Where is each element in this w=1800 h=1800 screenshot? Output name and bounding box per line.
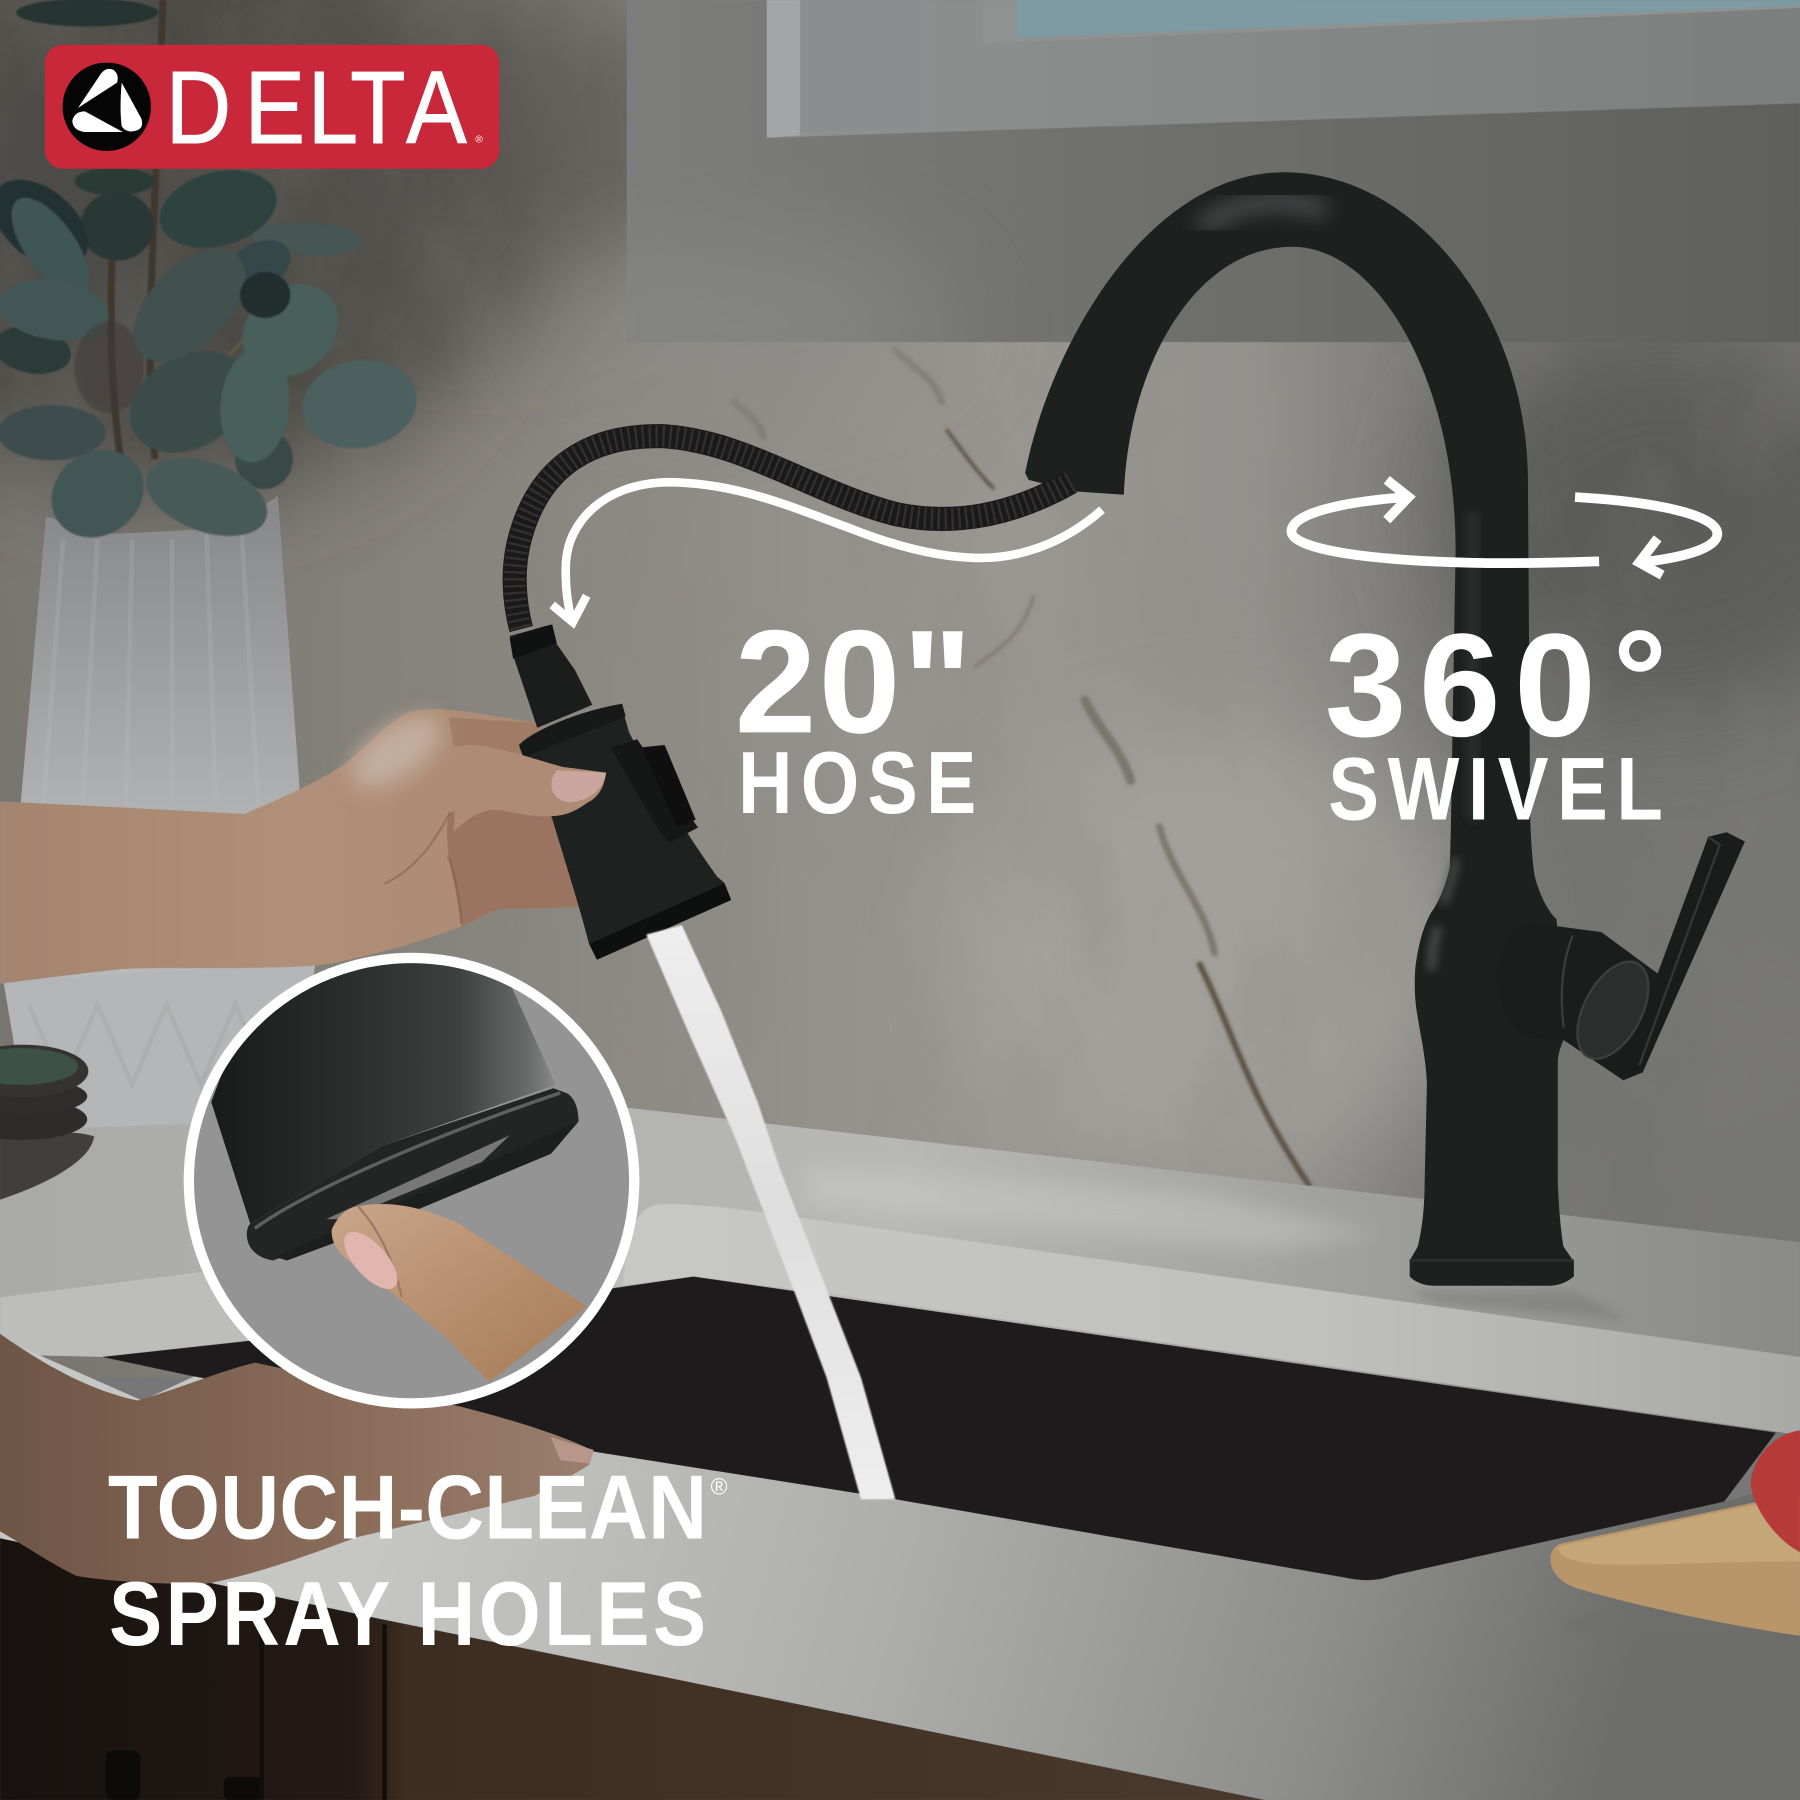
- wooden cabinet: [0, 1538, 1265, 1800]
- front countertop: [0, 1349, 1800, 1800]
- background: marble wall: [0, 0, 1800, 1378]
- cutting board and strawberry: [1550, 1430, 1800, 1640]
- callout: 360 degree swivel: SWIVEL: [1328, 739, 1663, 839]
- callout: touch-clean spray holes: ®: [711, 1474, 728, 1500]
- wordmark: DELTA: [166, 49, 467, 165]
- callout: 360 degree swivel: °: [1613, 601, 1667, 753]
- sink rim: [622, 1204, 1800, 1435]
- faucet gooseneck and body: [1025, 172, 1745, 1286]
- plant leaves in front of vase: [34, 432, 278, 555]
- callout: 360 degree swivel: [1325, 601, 1667, 839]
- registered mark: ®: [475, 134, 483, 145]
- pull-down sprayer: [453, 624, 731, 960]
- plant leaves and stems: [0, 0, 423, 489]
- callout: 20 inch hose: [735, 600, 976, 832]
- callout: 20 inch hose: HOSE: [738, 734, 976, 832]
- hand holding sprayer: [0, 702, 580, 984]
- inset: touch-clean spray holes detail: [189, 947, 634, 1403]
- hose arrow: [552, 482, 1102, 622]
- vase: [3, 496, 316, 1131]
- braided hose: [515, 436, 1071, 629]
- logo mark: [63, 63, 151, 151]
- water stream: [646, 925, 895, 1499]
- mixing handle: [1497, 832, 1745, 1080]
- window soffit: [540, 0, 1800, 402]
- swivel arrows: [1291, 480, 1717, 575]
- stacked plates: [0, 1045, 94, 1200]
- countertop behind sink: [0, 1108, 1800, 1435]
- index finger and nail: [453, 745, 606, 832]
- callout: 360 degree swivel: 360: [1325, 604, 1596, 768]
- window frame: [767, 0, 1800, 138]
- callout: touch-clean spray holes: [108, 1457, 728, 1665]
- callout: touch-clean spray holes: SPRAY HOLES: [109, 1564, 706, 1665]
- DELTA logo badge: [45, 45, 499, 169]
- fingertip: [332, 1204, 587, 1382]
- resting hand: [0, 1334, 593, 1584]
- sink basin: [102, 1277, 1776, 1580]
- callout: 20 inch hose: 20": [735, 600, 972, 764]
- sprayer head close-up: [211, 947, 579, 1260]
- callout: touch-clean spray holes: TOUCH-CLEAN: [108, 1457, 707, 1558]
